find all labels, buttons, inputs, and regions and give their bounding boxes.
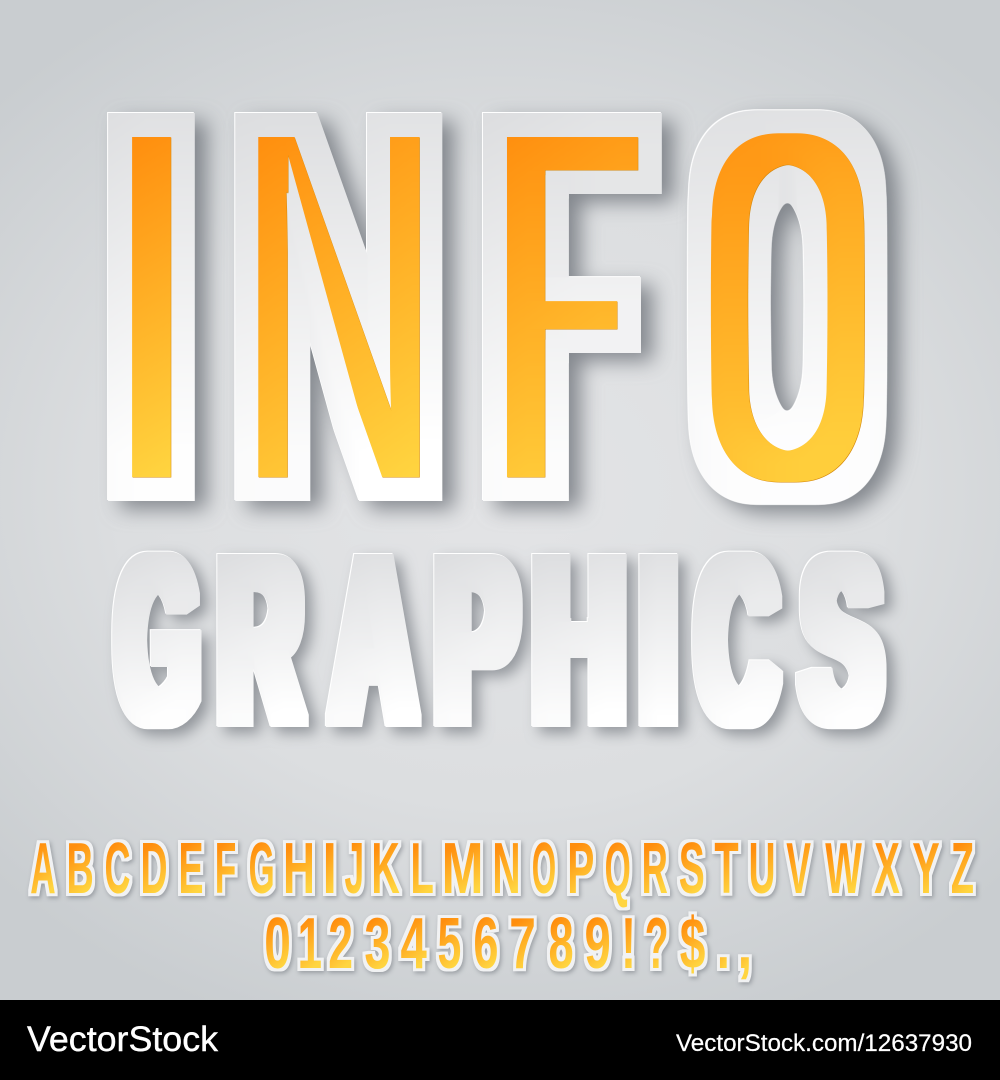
title word: GRAPHICS: C <box>698 509 776 771</box>
numerals and punctuation row: , <box>737 902 752 984</box>
letter O: O <box>712 91 864 358</box>
letter F: F <box>496 30 639 582</box>
alphabet row: G <box>249 827 275 908</box>
letter O <box>686 105 912 526</box>
numerals and punctuation row: 7 <box>509 903 536 985</box>
title word: GRAPHICS: P <box>436 510 517 771</box>
numerals and punctuation row: . <box>717 903 730 985</box>
alphabet row: P <box>567 829 594 909</box>
numerals and punctuation row: 2 <box>328 902 353 984</box>
alphabet row: O <box>532 827 556 909</box>
numerals and punctuation row: 0 <box>264 903 291 985</box>
alphabet row: U <box>749 829 775 909</box>
footer bar <box>0 1000 1000 1080</box>
title word: GRAPHICS: S <box>803 510 881 772</box>
numerals and punctuation row: 6 <box>473 902 498 984</box>
alphabet row: M <box>442 828 483 909</box>
numerals and punctuation row: 3 <box>364 903 391 983</box>
alphabet row: B <box>66 829 94 909</box>
alphabet row: F <box>215 828 236 910</box>
alphabet row: X <box>874 828 900 909</box>
alphabet row: T <box>714 828 739 909</box>
alphabet row: Z <box>951 829 974 909</box>
alphabet row: C <box>104 828 131 909</box>
title word: GRAPHICS: G <box>118 510 198 772</box>
title word: GRAPHICS <box>111 550 902 744</box>
numerals and punctuation row: 1 <box>298 903 322 984</box>
footer image id: VectorStock.com/12637930 <box>676 1030 972 1057</box>
letter O: O <box>712 91 864 358</box>
numerals and punctuation row: ! <box>621 902 636 984</box>
alphabet row: D <box>140 829 168 909</box>
alphabet row: A <box>30 828 56 910</box>
title word: GRAPHICS: A <box>333 510 415 771</box>
numerals and punctuation row: ? <box>645 903 669 984</box>
letter O: O <box>712 258 864 525</box>
alphabet row: J <box>345 828 364 910</box>
alphabet row: V <box>786 829 811 909</box>
alphabet row: K <box>371 828 400 909</box>
alphabet row: H <box>283 828 315 909</box>
footer brand: VectorStock <box>27 1020 219 1059</box>
numerals and punctuation row: 9 <box>584 902 611 983</box>
alphabet row <box>30 827 974 910</box>
alphabet row: S <box>679 828 705 909</box>
letter F: F <box>496 30 639 582</box>
title word: GRAPHICS: I <box>641 510 677 772</box>
alphabet row: L <box>410 828 434 909</box>
letter N: N <box>238 29 439 582</box>
title word: GRAPHICS: R <box>220 509 301 771</box>
title word: INFO <box>107 105 912 718</box>
alphabet row: I <box>322 828 337 909</box>
numerals and punctuation row: 4 <box>400 902 427 983</box>
title word: GRAPHICS: H <box>534 510 625 771</box>
alphabet row: N <box>492 828 521 909</box>
letter I: I <box>94 30 209 582</box>
letter N: N <box>238 29 439 582</box>
alphabet row: E <box>178 829 204 909</box>
letter O: O <box>712 258 864 525</box>
alphabet row: W <box>825 828 862 909</box>
letter I: I <box>94 30 209 582</box>
alphabet row: Y <box>912 828 940 909</box>
letter N <box>234 108 468 522</box>
numerals and punctuation row: 8 <box>548 902 574 984</box>
alphabet row: Q <box>605 829 631 910</box>
alphabet row: R <box>642 828 668 909</box>
numerals and punctuation row <box>264 902 752 985</box>
numerals and punctuation row: 5 <box>437 902 461 984</box>
numerals and punctuation row: $ <box>680 902 705 984</box>
